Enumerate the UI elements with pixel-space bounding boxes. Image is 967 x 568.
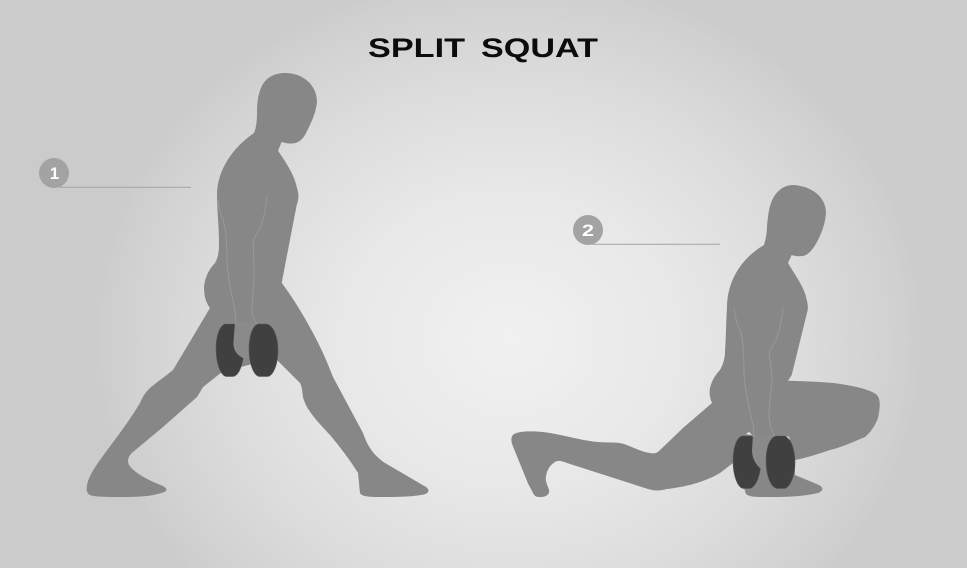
- leader line 1: [59, 186, 191, 188]
- callout 1: [39, 158, 191, 188]
- step number badge 2: 2: [582, 221, 594, 240]
- small highlight near back dumbbell: [746, 432, 752, 435]
- arm contour lines: [218, 195, 267, 324]
- arm contour lines: [734, 307, 783, 437]
- hand holding dumbbells: [752, 435, 780, 472]
- step number badge 1: 1: [50, 164, 59, 183]
- step number badge 1: [39, 158, 69, 188]
- dumbbell front plate: [249, 324, 278, 376]
- hand holding dumbbells: [233, 322, 258, 358]
- dumbbell back plate: [216, 324, 244, 376]
- body silhouette: [87, 73, 428, 497]
- figure 2: lunge bottom position: [511, 185, 880, 497]
- dumbbell front plate: [766, 436, 795, 488]
- leader line 2: [592, 243, 720, 245]
- title: SPLIT: [368, 33, 466, 63]
- callout 2: [573, 215, 720, 245]
- title: SQUAT: [481, 33, 599, 63]
- body silhouette: [511, 185, 880, 497]
- figure 1: standing split stance: [87, 73, 428, 497]
- small highlight near front dumbbell: [786, 436, 790, 440]
- step number badge 2: [573, 215, 603, 245]
- title: [368, 33, 599, 63]
- dumbbell back plate: [733, 436, 761, 488]
